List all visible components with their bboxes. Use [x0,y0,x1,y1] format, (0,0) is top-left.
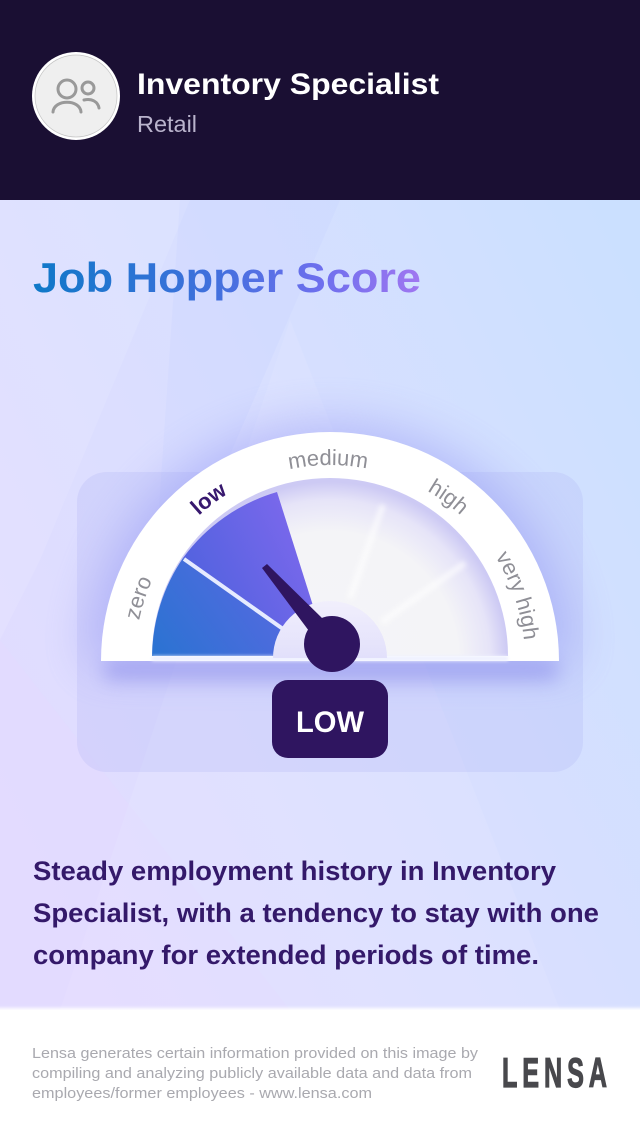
gauge panel backdrop [77,472,583,772]
disclaimer text [32,1045,479,1102]
gauge white band [101,432,559,661]
job title: Inventory Specialist [137,68,439,101]
description text: Steady employment history in Inventory [33,856,556,886]
description text: Specialist, with a tendency to stay with one [33,898,599,928]
needle [262,564,360,672]
footer [0,1008,640,1136]
segment: low [183,492,315,630]
disclaimer text: Lensa generates certain information provided on this image by [32,1045,479,1062]
logo: LENSA [502,1051,607,1097]
gauge [74,404,586,690]
disclaimer text: employees/former employees - www.lensa.com [32,1085,372,1102]
description text: company for extended periods of time. [33,940,539,970]
disclaimer text: compiling and analyzing publicly available data and data from [32,1065,472,1082]
background panel [0,200,640,1010]
header bar [0,0,640,200]
gauge scale labels: high [428,478,466,514]
description text [33,856,599,970]
baseline strip [152,656,508,661]
segment: zero [152,558,285,656]
icon: avatar with two people [32,52,120,140]
gauge scale labels: zero [128,578,150,620]
gauge scale labels: medium [288,449,367,469]
gauge inner dial [152,478,508,656]
job category: Retail [137,111,197,137]
gauge scale labels: low [189,484,226,515]
heading: Job Hopper Score [33,254,421,301]
faint segment dividers [350,505,465,622]
score badge: LOW [296,706,365,739]
score badge [272,680,388,758]
gauge hub [273,601,387,658]
gauge scale labels [128,449,539,639]
gauge scale labels: very high [498,550,539,639]
